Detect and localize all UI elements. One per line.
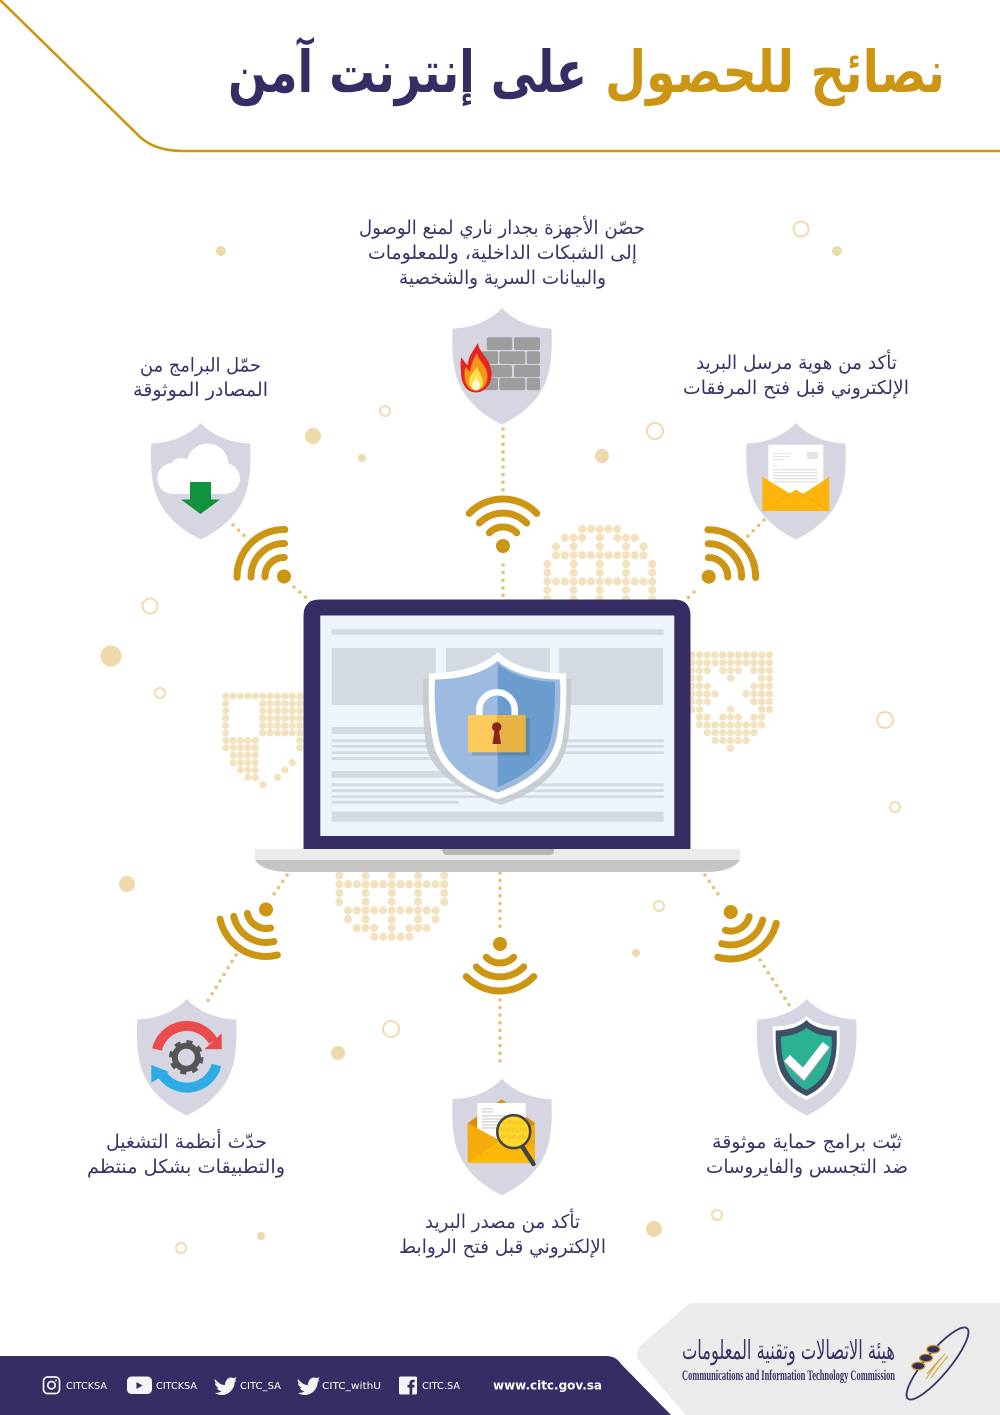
wifi icon: bottom centre bbox=[466, 937, 534, 991]
text block: antivirus: ضد التجسس والفايروسات bbox=[706, 1156, 908, 1178]
panel: trusted download tip bbox=[133, 354, 268, 540]
logo: emblem bbox=[899, 1321, 976, 1406]
text block: email links: تأكد من مصدر البريد bbox=[425, 1208, 580, 1233]
panel: email links tip bbox=[399, 1079, 606, 1258]
laptop bbox=[255, 600, 740, 872]
shield: email bbox=[746, 423, 846, 540]
text block: updates bbox=[87, 1129, 285, 1178]
footer bar bbox=[0, 1356, 671, 1415]
text block: download bbox=[133, 354, 268, 401]
text block: email sender bbox=[683, 349, 909, 399]
text block: email links: الإلكتروني قبل فتح الروابط bbox=[399, 1236, 606, 1258]
icon: envelope with magnifier: VIRUS bbox=[500, 1128, 528, 1134]
text block: firewall: إلى الشبكات الداخلية، وللمعلومات bbox=[368, 242, 637, 265]
decorative background dots bbox=[100, 222, 900, 1253]
footer logo panel bbox=[637, 1303, 1000, 1415]
dotted map: bottom bbox=[339, 876, 444, 937]
social: facebook bbox=[399, 1376, 460, 1394]
text block: email sender: تأكد من هوية مرسل البريد bbox=[696, 349, 897, 374]
text block: antivirus: ثبّت برامج حماية موثوقة bbox=[712, 1131, 902, 1153]
shield: updates bbox=[137, 999, 236, 1116]
website url: www.citc.gov.sa bbox=[493, 1378, 602, 1392]
panel: firewall tip bbox=[359, 216, 645, 424]
text block: updates: حدّث أنظمة التشغيل bbox=[106, 1129, 267, 1153]
laptop base bbox=[255, 849, 740, 872]
wifi icon: top right bbox=[680, 520, 766, 606]
panel: antivirus tip bbox=[706, 999, 908, 1178]
text block: firewall: حصّن الأجهزة بجدار ناري لمنع الوصول bbox=[359, 216, 645, 239]
icon: envelope with magnifier bbox=[468, 1099, 535, 1164]
logo: organisation name bbox=[682, 1336, 895, 1384]
wifi icon: bottom left bbox=[212, 886, 298, 967]
icon: brick wall and flame bbox=[461, 337, 540, 392]
wifi icon: top left bbox=[227, 519, 313, 605]
icon: green shield check bbox=[773, 1016, 840, 1100]
security shield bbox=[423, 652, 571, 805]
social: twitter bbox=[215, 1377, 281, 1395]
icon: open envelope with letter bbox=[762, 445, 829, 511]
text block: firewall: والبيانات السرية والشخصية bbox=[399, 267, 606, 289]
title bbox=[228, 36, 945, 107]
laptop screen bbox=[320, 616, 674, 836]
shield: email links bbox=[452, 1079, 552, 1195]
icon: sync arrows and gear bbox=[151, 1026, 222, 1088]
social: facebook: CITC.SA bbox=[422, 1381, 460, 1392]
shield: antivirus bbox=[757, 999, 856, 1116]
social: instagram bbox=[44, 1377, 107, 1394]
icon: envelope with magnifier: VIRUS bbox=[503, 1121, 525, 1127]
text block: email sender: الإلكتروني قبل فتح المرفقات bbox=[683, 377, 909, 399]
shield: download bbox=[151, 423, 250, 540]
social: youtube bbox=[127, 1376, 197, 1394]
header corner line bbox=[0, 0, 1000, 151]
text block: download: حمّل البرامج من bbox=[140, 354, 261, 376]
dotted map: right bbox=[692, 655, 769, 748]
dotted map: top bbox=[547, 529, 652, 599]
social: instagram: CITCKSA bbox=[66, 1381, 107, 1392]
dotted connector lines bbox=[207, 429, 790, 1062]
dotted map: left bbox=[226, 696, 300, 785]
icon: envelope with magnifier: VIRUS bbox=[501, 1135, 527, 1141]
text block: updates: والتطبيقات بشكل منتظم bbox=[87, 1156, 285, 1178]
wifi icon: bottom right bbox=[698, 889, 783, 970]
screen placeholder content bbox=[332, 629, 664, 822]
text block: antivirus bbox=[706, 1131, 908, 1178]
social: twitter 2 bbox=[298, 1377, 381, 1395]
social: youtube: CITCKSA bbox=[156, 1381, 197, 1392]
panel: update systems tip bbox=[87, 999, 285, 1178]
social: twitter: CITC_SA bbox=[240, 1381, 281, 1392]
padlock bbox=[468, 692, 530, 756]
icon: cloud download bbox=[157, 444, 240, 514]
panel: email sender tip bbox=[683, 349, 909, 540]
laptop frame bbox=[304, 600, 690, 852]
shield: firewall bbox=[452, 308, 552, 424]
text block: download: المصادر الموثوقة bbox=[133, 379, 268, 401]
social: twitter 2: CITC_withU bbox=[322, 1381, 381, 1392]
text block: firewall bbox=[359, 216, 645, 289]
text block: email links bbox=[399, 1208, 606, 1258]
title: على إنترنت آمن bbox=[228, 36, 587, 107]
wifi icon: top bbox=[469, 499, 537, 553]
